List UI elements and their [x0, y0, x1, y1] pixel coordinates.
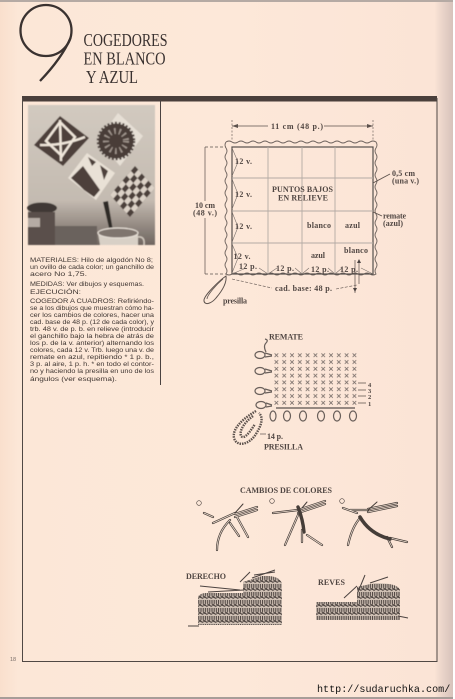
row markers: 3: [368, 388, 372, 395]
grid labels: PUNTOS BAJOS: [272, 185, 334, 194]
potholder: checkerboard: [110, 166, 155, 217]
step 1: [197, 501, 257, 550]
text block: materials and instructions: ángulos (ver esquema).: [30, 376, 117, 383]
jar and cup: [27, 201, 144, 245]
row markers: [358, 382, 372, 408]
callouts: (azul): [383, 219, 403, 228]
grid labels: 12 v.: [235, 222, 252, 231]
illustration: reves: REVES: [318, 578, 346, 587]
potholder: round scalloped: [98, 113, 143, 166]
width dimension: [232, 120, 373, 140]
shells along edges: [255, 339, 356, 421]
text block: materials and instructions: MEDIDAS: Ver dibujos y esquemas.: [30, 281, 144, 288]
page number: 18: [10, 657, 16, 663]
text block: materials and instructions: un ovillo de cada color; un ganchillo de: [30, 264, 154, 271]
height dimension: 10 cm: [195, 201, 215, 210]
grid labels: 12 v.: [235, 190, 252, 199]
illustration: reves: [316, 575, 408, 620]
presilla loop: presilla: [223, 296, 247, 306]
potholder: stripes: [68, 153, 115, 200]
text block: materials and instructions: el ganchillo bajo la hebra de atrás de: [30, 333, 154, 340]
panel: photo of potholders: [27, 105, 155, 245]
illustration: derecho: [186, 570, 282, 626]
chart: remate stitch diagram: 14 p.: [267, 432, 283, 441]
row markers: 4: [368, 382, 372, 389]
grid labels: 12 v.: [235, 157, 252, 166]
title: COGEDORES: [84, 30, 168, 50]
callouts: [232, 169, 419, 293]
grid labels: azul: [311, 251, 326, 260]
row markers: 1: [368, 401, 371, 408]
text block: materials and instructions: cer los cambios de colores, hacer una: [30, 312, 154, 319]
grid labels: 12 p.: [311, 265, 329, 274]
potholder: diamond motif: [34, 116, 89, 166]
text block: materials and instructions: [30, 257, 155, 383]
text block: materials and instructions: MATERIALES: Hilo de algodón No 8;: [30, 257, 153, 264]
title: EN BLANCO: [84, 48, 166, 68]
illustration: derecho: DERECHO: [186, 572, 226, 581]
text block: materials and instructions: no y haciendo la presilla en uno de los: [30, 368, 155, 375]
frame: [22, 96, 437, 662]
text block: materials and instructions: trb. 48 v. de p. b. en relieve (introducir: [30, 326, 155, 333]
grid labels: 12 v.: [234, 252, 250, 261]
wavy remate border: [225, 141, 377, 275]
grid: [232, 147, 373, 274]
grid labels: 12 p.: [340, 265, 358, 274]
illustration: colour change steps: [197, 499, 407, 550]
title: [84, 30, 168, 87]
text block: materials and instructions: 3 p. al aire, 1 p. h. * en todo el contor-: [30, 361, 154, 368]
text block: materials and instructions: cad. base de 48 p. (12 de cada color), y: [30, 319, 155, 326]
callouts: 0,5 cm: [392, 169, 415, 178]
row markers: 2: [368, 394, 371, 401]
website url: http://sudaruchka.com/: [317, 684, 450, 696]
chart: remate stitch diagram: [234, 332, 372, 452]
height dimension: (48 v.): [193, 208, 217, 218]
step 2: [270, 499, 325, 545]
text block: materials and instructions: se a los dibujos que muestran cómo ha-: [30, 305, 154, 312]
callouts: (una v.): [392, 176, 419, 186]
title: Y AZUL: [86, 67, 138, 87]
heading: cambios de colores: CAMBIOS DE COLORES: [240, 486, 333, 495]
callouts: cad. base: 48 p.: [275, 284, 332, 293]
text block: materials and instructions: COGEDOR A CUADROS: Refiriéndo-: [30, 298, 154, 305]
chart: remate stitch diagram: PRESILLA: [264, 442, 303, 452]
text block: materials and instructions: colores, cada 12 v. Trb. luego una v. de: [30, 347, 154, 354]
step 3: [340, 499, 407, 547]
width dimension: 11 cm (48 p.): [271, 122, 323, 131]
grid labels: blanco: [307, 221, 331, 230]
callouts: remate: [383, 212, 406, 220]
grid labels: blanco: [344, 246, 368, 255]
grid labels: 12 p.: [239, 262, 257, 271]
grid labels: EN RELIEVE: [278, 194, 328, 202]
chart: potholder schematic: [193, 120, 419, 306]
big number 9: [20, 5, 72, 81]
grid labels: 12 p.: [276, 264, 294, 273]
text block: materials and instructions: acero No 1,75.: [30, 271, 87, 278]
grid labels: azul: [345, 221, 361, 230]
text block: materials and instructions: remate en azul, repitiendo * 1 p. b.,: [30, 354, 154, 361]
height dimension: [193, 147, 226, 274]
grid labels: [234, 157, 368, 274]
presilla loop: [204, 276, 247, 306]
text block: materials and instructions: los p. de la v. anterior) alternando los: [30, 340, 155, 347]
presilla stitches: [234, 411, 262, 444]
chart: remate stitch diagram: REMATE: [269, 332, 303, 342]
text block: materials and instructions: EJECUCIÓN:: [30, 287, 81, 296]
stitch grid: [272, 352, 358, 406]
